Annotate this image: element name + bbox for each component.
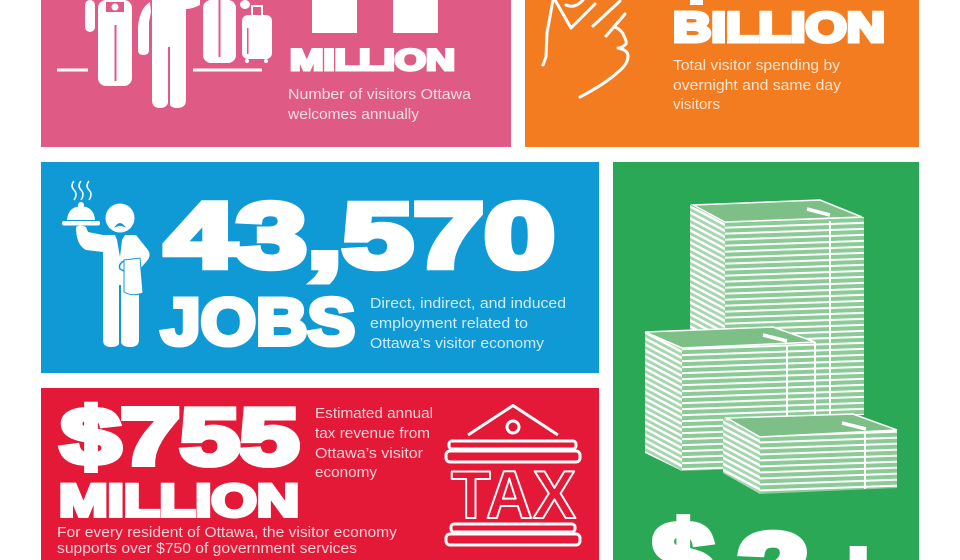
stack: tall [690, 200, 864, 420]
text: visitors description: Number of visitors Ottawa [288, 86, 472, 103]
text: jobs description [370, 295, 566, 352]
text: government services note: For every resident of Ottawa, the visitor economy [57, 524, 398, 541]
text: tax description: Estimated annual [315, 405, 433, 422]
heading: BILLION: BILLION [673, 4, 885, 50]
big number: $755: $755 [61, 392, 299, 481]
text: spending description: Total visitor spending by [673, 57, 841, 74]
big number fragment: dollar sign [690, 0, 703, 5]
text: spending description: overnight and same day [673, 77, 842, 94]
text: tax description: Ottawa’s visitor [315, 445, 423, 462]
text: visitors description: welcomes annually [287, 106, 420, 123]
text: spending description [673, 57, 842, 113]
big number: 11 [312, 0, 438, 33]
text: government services note: supports over $750 of government services [57, 540, 357, 557]
text: government services note [57, 524, 398, 557]
big number: economic output [652, 502, 887, 560]
icon: visitors group [57, 0, 272, 108]
text: tax description: tax revenue from [315, 425, 430, 442]
panel: economic output [613, 162, 919, 560]
heading: MILLION: MILLION [59, 475, 299, 526]
heading: JOBS: JOBS [161, 284, 355, 358]
icon: tax building [446, 406, 580, 545]
text: spending description: visitors [673, 96, 720, 113]
icon: money stacks [645, 200, 897, 494]
stack: medium [645, 327, 815, 471]
heading: MILLION: MILLION [290, 44, 455, 77]
panel: tax revenue [41, 388, 599, 560]
text: jobs description: employment related to [370, 315, 528, 332]
icon: tax building: TAX [451, 457, 576, 533]
panel: spending [525, 0, 919, 147]
text: tax description: economy [315, 464, 377, 481]
panel: visitors [41, 0, 511, 147]
icon: hand holding money [543, 0, 628, 97]
stack: short [723, 414, 897, 494]
text: jobs description: Direct, indirect, and induced [370, 295, 566, 312]
text: tax description [315, 405, 433, 481]
big number: 43,570: 43,570 [165, 185, 555, 287]
text: jobs description: Ottawa’s visitor economy [370, 335, 545, 352]
text: visitors description [287, 86, 472, 123]
panel: jobs [41, 162, 599, 373]
icon: waiter [62, 181, 150, 347]
